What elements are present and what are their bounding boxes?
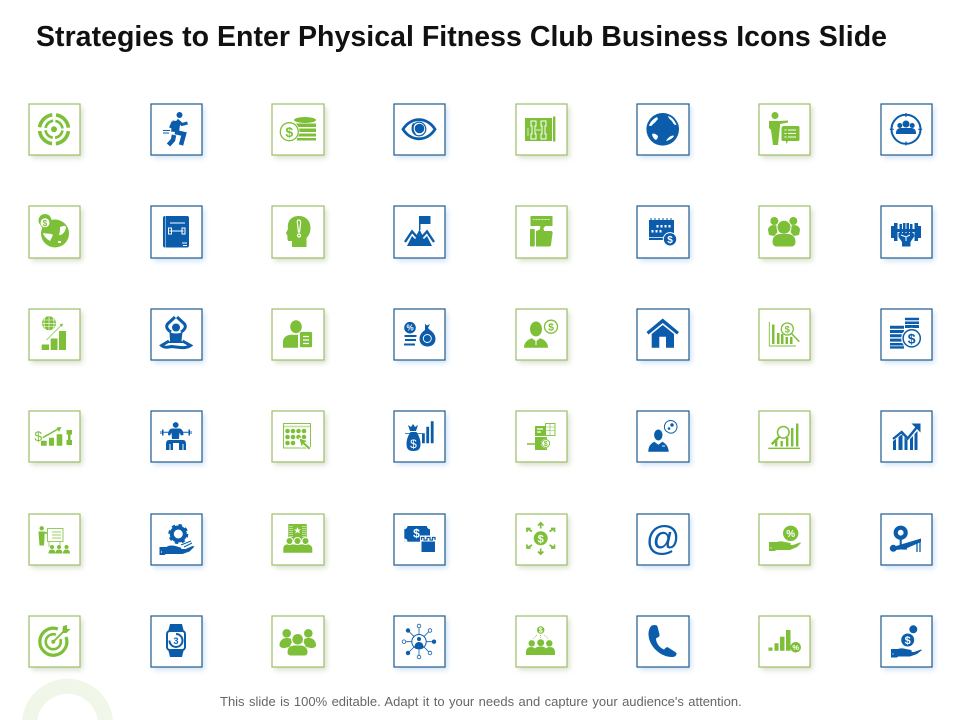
icon: hand with percent coin: % — [786, 529, 795, 540]
icon: screen with audience — [272, 514, 326, 568]
icon: fist with dumbbell — [881, 206, 934, 261]
icon: coin stacks — [881, 309, 934, 363]
icon: chart under magnifier: $ — [785, 324, 791, 336]
icon: businessman with dollar bubble: $ — [548, 322, 554, 334]
icon: dollar growth and dumbbell: $ — [34, 428, 42, 444]
icon: three people — [272, 616, 326, 670]
icon: dollar with arrows: $ — [538, 533, 544, 545]
icon: yoga pose — [151, 309, 204, 363]
icon: calendar with dollar — [637, 206, 692, 261]
icon: smartwatch — [151, 616, 204, 670]
decorative ring — [22, 679, 113, 720]
icon: percent coin and money bag: % — [406, 324, 414, 333]
icon: dollar growth and dumbbell — [29, 411, 82, 465]
icon: eye — [394, 104, 448, 158]
icon: globe — [637, 104, 692, 158]
icon: at sign: @ — [646, 520, 680, 558]
icon: mountain flag — [394, 206, 448, 261]
icon: phone handset — [637, 616, 692, 670]
icon: bars with percent — [759, 616, 812, 670]
icon: dollar with arrows — [516, 514, 570, 568]
icon: cash and box: $ — [413, 527, 420, 541]
icon: globe with pin — [29, 206, 82, 261]
icon: team with coin — [516, 616, 570, 670]
icon: percent coin and money bag — [394, 309, 448, 363]
icon: hand with percent coin — [759, 514, 812, 568]
icon: person with document — [272, 309, 326, 363]
icon: coins — [272, 104, 326, 158]
icon: chest press bench — [881, 514, 934, 568]
icon: hand with coins: $ — [905, 635, 911, 647]
icon: team group — [759, 206, 812, 261]
icon: hand with coins — [881, 616, 934, 670]
icon: head with exclamation — [272, 206, 326, 261]
icon: bullseye with arrow — [29, 616, 82, 670]
icon: blueprint — [516, 104, 570, 158]
icon: smartwatch: 3 — [173, 636, 179, 646]
icon: globe and growth bars — [29, 309, 82, 363]
icon: agent with idea bubble — [637, 411, 692, 465]
icon: chart under magnifier — [759, 309, 812, 363]
icon: seated lifter — [151, 411, 204, 465]
icon: businessman with dollar bubble — [516, 309, 570, 363]
icon: presenter with speech bubble — [759, 104, 812, 158]
title: Strategies to Enter Physical Fitness Club Business Icons Slide — [36, 21, 887, 53]
icon: house — [637, 309, 692, 363]
icon: crosshair target — [29, 104, 82, 158]
icon: calendar with dollar: $ — [667, 235, 673, 246]
footer note: This slide is 100% editable. Adapt it to your needs and capture your audience's attention. — [220, 694, 742, 709]
icon: finance documents: $ — [544, 441, 548, 448]
icon: finance documents — [516, 411, 570, 465]
icon: cash and box — [394, 514, 448, 568]
icon: calendar with cursor — [272, 411, 326, 465]
icon: growth chart arrow — [881, 411, 934, 465]
icon: money bag and bars: $ — [410, 437, 417, 451]
icon: at sign — [637, 514, 692, 568]
icon: team with coin: $ — [539, 628, 543, 634]
icon: coins: $ — [285, 124, 293, 140]
icon: presenter and audience — [29, 514, 82, 568]
icon: hand with gear — [151, 514, 204, 568]
icon: coin stacks: $ — [908, 330, 916, 346]
icon: globe with pin: $ — [43, 219, 48, 228]
icon: thumbs up with bubble — [516, 206, 570, 261]
icon: people in crosshair — [881, 104, 934, 158]
icon: bars with percent: % — [792, 643, 799, 652]
icon: money bag and bars — [394, 411, 448, 465]
icon: magnifier over bars — [759, 411, 812, 465]
icon: network of people — [394, 616, 448, 670]
icon: runner — [151, 104, 204, 158]
icon: workout book — [151, 206, 204, 261]
